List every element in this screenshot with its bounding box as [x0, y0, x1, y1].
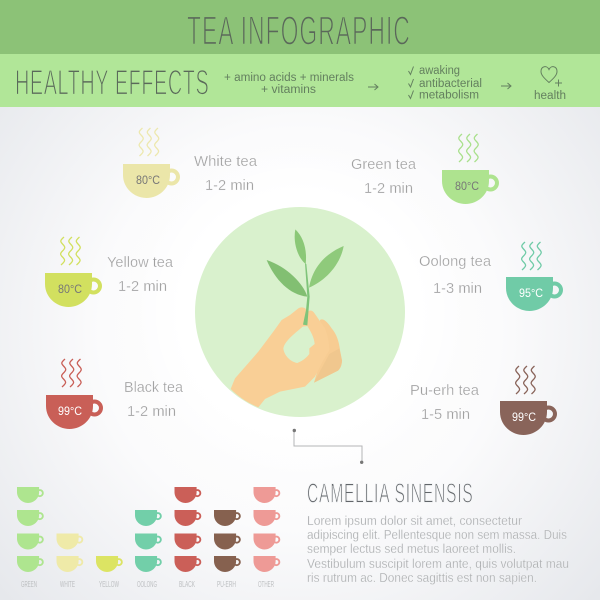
tea: black	[46, 359, 184, 429]
icon: back fingers	[314, 319, 342, 383]
column: pu-erh: PU-ERH	[217, 579, 236, 589]
effects checklist: metabolism	[419, 90, 479, 102]
body text: semper lectus sed metus laoreet mollis.	[307, 542, 516, 556]
heading: healthy effects: HEALTHY EFFECTS	[15, 64, 209, 103]
body text	[307, 514, 569, 585]
arrow 1	[368, 84, 378, 90]
tea: oolong: 95°C	[519, 286, 543, 300]
health label: health	[534, 90, 566, 102]
central circle with hand and tea sprig	[195, 207, 405, 417]
icon: right leaf	[309, 246, 344, 288]
icon: pu-erh cup	[500, 366, 557, 435]
tea: green: Green tea	[351, 156, 417, 173]
connector	[293, 429, 363, 464]
column: green	[17, 487, 44, 589]
column: white	[56, 534, 83, 589]
column: other	[254, 487, 280, 589]
tea: pu-erh: 99°C	[512, 410, 536, 424]
tea: pu-erh	[410, 366, 557, 435]
column: black	[174, 487, 201, 589]
effects checklist	[408, 65, 482, 102]
icon: stem	[303, 263, 310, 325]
title: TEA INFOGRAPHIC	[187, 9, 410, 54]
tea: yellow	[45, 237, 174, 307]
tea: black: 1-2 min	[127, 403, 176, 420]
body text: Vestibulum suscipit lorem ante, quis volutpat mau	[307, 557, 569, 571]
tea: pu-erh: Pu-erh tea	[410, 382, 480, 399]
ingredients text: + vitamins	[261, 84, 316, 96]
tea: green	[351, 134, 499, 204]
tea: white: White tea	[194, 153, 258, 170]
column: oolong: OOLONG	[137, 579, 157, 589]
icon: green cup	[442, 134, 499, 204]
column: oolong	[135, 510, 162, 589]
ingredients text	[224, 72, 354, 96]
icon: heart plus	[541, 67, 562, 86]
tea: white: 80°C	[136, 173, 160, 187]
tea: oolong	[419, 242, 563, 311]
column: white: WHITE	[60, 579, 75, 589]
tea: green: 80°C	[455, 179, 479, 193]
effects checklist: antibacterial	[419, 78, 482, 90]
column: pu-erh	[214, 510, 241, 589]
tea: white	[123, 128, 258, 198]
icon: left leaf	[267, 260, 307, 297]
body text: ris rutrum ac. Donec sagittis est non sapien.	[307, 571, 537, 585]
body text: adipiscing elit. Pellentesque non sem massa. Duis	[307, 528, 567, 542]
tea: white: 1-2 min	[205, 177, 254, 194]
ingredients text: + amino acids + minerals	[224, 72, 354, 84]
column: yellow: YELLOW	[99, 579, 119, 589]
icon: top leaf	[295, 229, 306, 264]
tea: black: Black tea	[124, 379, 184, 396]
icon: yellow cup	[45, 237, 102, 307]
arrow 2	[501, 83, 511, 89]
icon: black cup	[46, 359, 103, 429]
tea: yellow: Yellow tea	[107, 254, 174, 271]
tea: yellow: 80°C	[58, 282, 82, 296]
pictogram chart: cups by tea type	[17, 487, 280, 589]
tea: pu-erh: 1-5 min	[421, 406, 470, 423]
icon: oolong cup	[506, 242, 563, 311]
tea: black: 99°C	[58, 404, 82, 418]
column: black: BLACK	[179, 579, 195, 589]
body text: Lorem ipsum dolor sit amet, consectetur	[307, 514, 522, 528]
column: other: OTHER	[258, 579, 274, 589]
tea: oolong: Oolong tea	[419, 253, 492, 270]
effects checklist: awaking	[419, 65, 460, 77]
healthy effects band	[0, 54, 600, 107]
heading: camellia sinensis: CAMELLIA SINENSIS	[307, 476, 473, 508]
tea: yellow: 1-2 min	[118, 278, 167, 295]
icon: hand	[231, 307, 329, 407]
title band	[0, 0, 600, 54]
icon: white cup	[123, 128, 180, 198]
tea: green: 1-2 min	[364, 180, 413, 197]
column: yellow	[96, 556, 123, 589]
tea: oolong: 1-3 min	[433, 280, 482, 297]
column: green: GREEN	[21, 579, 37, 589]
